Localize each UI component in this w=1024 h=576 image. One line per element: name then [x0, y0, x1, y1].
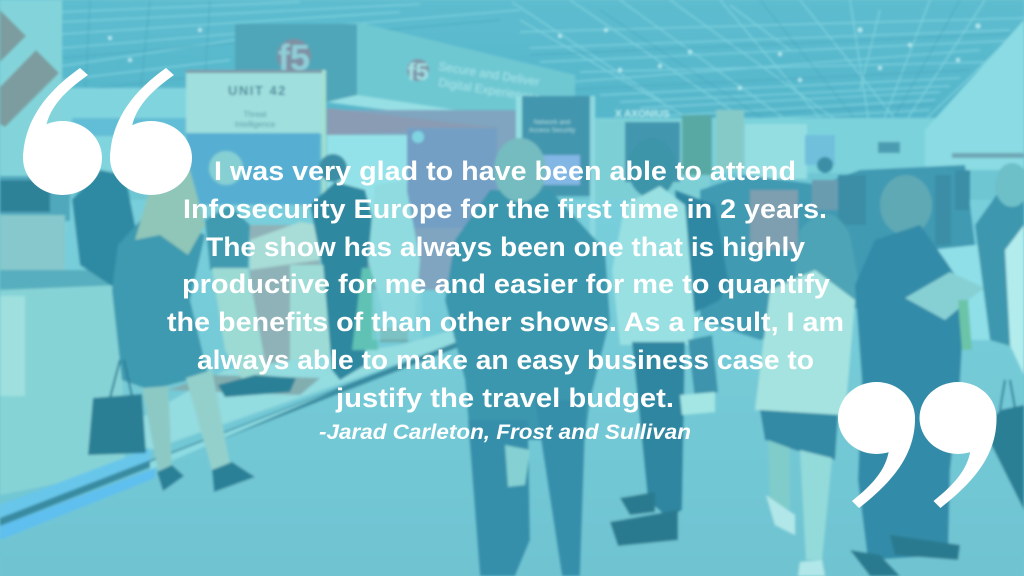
man in dark top and jeans, centre: [445, 138, 610, 576]
F5 booth sign with text: Secure and Deliver: [438, 59, 541, 89]
left booth panel: [0, 0, 62, 176]
dark-shirted person at counter: [72, 170, 140, 290]
icon: opening quotation mark: [23, 68, 192, 195]
woman in light jacket and skirt: [755, 214, 862, 576]
floor: [0, 200, 1024, 576]
testimonial quote: justify the travel budget.: [335, 383, 674, 413]
F5 booth sign with text: [327, 22, 575, 135]
booth counter and lower wall: [250, 222, 330, 375]
mid distance band behind sign: [62, 88, 192, 188]
back wall: [575, 118, 935, 173]
Unit 42 sign: Intelligence: [235, 120, 276, 129]
Network and Access Security totem: Access Security: [529, 127, 576, 134]
testimonial quote: [167, 156, 844, 413]
testimonial quote: Infosecurity Europe for the first time in 2 years.: [183, 194, 827, 224]
booth interior walls: [327, 108, 517, 290]
attribution: -Jarad Carleton, Frost and Sullivan: [319, 421, 691, 444]
left booth counter and base: [0, 176, 125, 495]
Unit 42 sign: Threat: [243, 110, 267, 119]
platform edge strip: [0, 340, 464, 540]
man in light trousers behind: [368, 180, 422, 342]
distant crowd: [700, 157, 975, 340]
testimonial quote: productive for me and easier for me to quantify: [182, 269, 830, 299]
man and bag at far right: [975, 163, 1024, 510]
dark F5 fascia: f5: [278, 37, 310, 78]
dark F5 fascia: [235, 24, 357, 102]
Network and Access Security totem: Network and: [534, 119, 571, 126]
testimonial quote: I was very glad to have been able to attend: [214, 156, 796, 186]
Network and Access Security totem: [516, 96, 595, 246]
man in dark top at booth: [310, 154, 378, 380]
Axonius stand: X AXONIUS: [615, 109, 670, 120]
testimonial quote: the benefits of than other shows. As a result, I am: [167, 307, 844, 337]
red carpet edge: [168, 375, 320, 395]
man in polo and light trousers: [205, 151, 296, 397]
testimonial quote: The show has always been one that is highly: [206, 232, 805, 262]
right wall: [925, 20, 1024, 170]
booth platform floor: [120, 325, 470, 450]
testimonial quote: always able to make an easy business case to: [197, 345, 814, 375]
Unit 42 sign: UNIT 42: [228, 83, 287, 98]
man in navy polo: [850, 175, 985, 576]
man in white hoodie with backpack: [610, 138, 728, 546]
ceiling: [62, 0, 1024, 135]
F5 booth sign with text: f5: [407, 59, 429, 86]
woman with handbag: [88, 162, 255, 492]
Unit 42 screen: [186, 133, 320, 205]
Unit 42 sign: [186, 70, 326, 200]
icon: closing quotation mark: [838, 382, 997, 508]
Axonius stand: [595, 109, 744, 200]
F5 booth sign with text: Digital Experiences: [438, 75, 541, 105]
corridor floor: [920, 245, 1010, 340]
